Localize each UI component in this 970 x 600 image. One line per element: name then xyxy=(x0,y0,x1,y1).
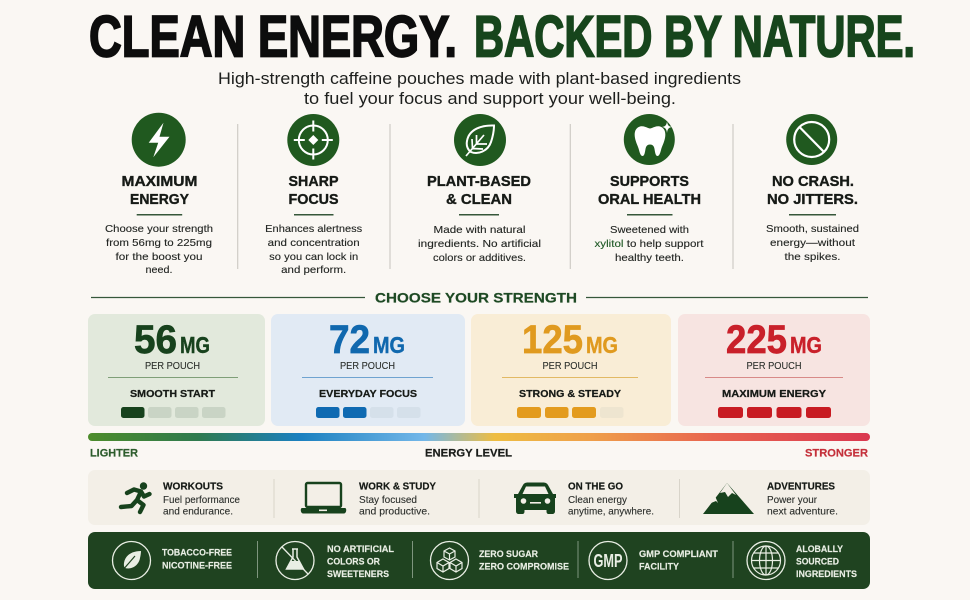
dose value: 125mg: 125 xyxy=(522,318,583,362)
heading: supports oral health xyxy=(598,174,701,216)
dose value: 56mg: MG xyxy=(180,332,210,358)
subtitle: to fuel your focus and support your well-being. xyxy=(304,89,676,108)
badge: tobacco-free nicotine-free: NICOTINE-FREE xyxy=(162,560,232,572)
strength meter: 4 of 4 xyxy=(718,407,831,418)
card: 72mg: PER POUCH xyxy=(340,361,395,372)
heading: plant-based and clean xyxy=(427,174,531,216)
text: maximum energy: for the boost you xyxy=(116,251,203,263)
strength meter: 1 of 4 xyxy=(121,407,226,418)
icon: target xyxy=(287,114,339,166)
card: 72mg xyxy=(271,314,465,426)
card: 225mg xyxy=(678,314,870,426)
use case: on the go: ON THE GO xyxy=(568,482,623,492)
title xyxy=(89,4,915,69)
badge: GMP compliant facility: FACILITY xyxy=(639,562,680,572)
text: sharp focus: and concentration xyxy=(268,237,360,249)
badge: globally sourced ingredients: ALOBALLY xyxy=(796,544,844,555)
use case: work and study xyxy=(359,482,436,518)
panel: use cases xyxy=(88,470,870,525)
benefit dividers xyxy=(238,124,733,269)
panel: trust badges xyxy=(88,532,870,589)
heading: sharp focus: FOCUS xyxy=(288,192,339,208)
badge: GMP compliant facility: GMP COMPLIANT xyxy=(639,549,718,560)
benefit: sharp focus xyxy=(265,114,362,276)
strength meter: 2 of 4 xyxy=(316,407,420,418)
use case: workouts: WORKOUTS xyxy=(163,482,223,492)
badge: globally sourced ingredients xyxy=(796,544,857,580)
badge: no artificial colors or sweeteners: COLORS OR xyxy=(327,556,380,568)
badge: tobacco-free nicotine-free: TOBACCO-FREE xyxy=(162,548,232,558)
icon: car xyxy=(514,482,556,514)
badge: zero sugar zero compromise xyxy=(479,549,569,572)
badge icon: cubes xyxy=(430,542,468,580)
badge icon: GMP: GMP xyxy=(594,551,622,571)
dose value: 225mg: 225 xyxy=(726,318,787,362)
text: no crash no jitters: the spikes. xyxy=(784,251,840,263)
use case: on the go: anytime, anywhere. xyxy=(568,506,654,518)
dose value: 56mg xyxy=(134,318,210,362)
badge icon: leaf xyxy=(112,542,150,580)
title: CLEAN ENERGY. xyxy=(89,4,457,69)
heading: no crash no jitters: NO JITTERS. xyxy=(767,192,858,208)
text: no crash no jitters: energy—without xyxy=(770,237,855,249)
text: supports oral health: xylitol to help support xyxy=(594,238,704,250)
text: sharp focus xyxy=(265,223,362,276)
icon: prohibition sign xyxy=(786,114,837,165)
text: supports oral health: Sweetened with xyxy=(610,224,689,236)
text: maximum energy: from 56mg to 225mg xyxy=(106,237,212,249)
badge icon: crossed flask xyxy=(276,542,314,580)
card: 125mg: PER POUCH xyxy=(542,361,598,372)
text: maximum energy: need. xyxy=(146,264,172,276)
badge: globally sourced ingredients: SOURCED xyxy=(796,556,839,568)
text: sharp focus: so you can lock in xyxy=(269,251,358,263)
text: supports oral health xyxy=(594,224,704,264)
badge icon: GMP xyxy=(589,542,627,580)
badge: no artificial colors or sweeteners xyxy=(327,544,394,580)
heading: maximum energy: ENERGY xyxy=(130,192,189,208)
card: 56mg xyxy=(88,314,265,426)
strength meter: 3 of 4 xyxy=(517,407,624,418)
subtitle: High-strength caffeine pouches made with plant-based ingredients xyxy=(218,69,741,88)
card: 125mg xyxy=(471,314,671,426)
subtitle xyxy=(218,69,741,108)
heading: sharp focus: SHARP xyxy=(288,174,339,190)
use case: on the go: Clean energy xyxy=(568,495,627,506)
badge: zero sugar zero compromise: ZERO SUGAR xyxy=(479,549,538,560)
badge: no artificial colors or sweeteners: NO ARTIFICIAL xyxy=(327,544,394,555)
text: maximum energy: Choose your strength xyxy=(105,223,213,235)
icon: laptop xyxy=(301,483,346,514)
card: 125mg: STRONG & STEADY xyxy=(519,388,621,400)
card: 72mg: EVERYDAY FOCUS xyxy=(319,388,417,400)
dose value: 225mg: MG xyxy=(790,332,822,358)
use case: adventures xyxy=(767,482,838,518)
dose value: 56mg: 56 xyxy=(134,318,177,362)
text: plant-based and clean: ingredients. No artificial xyxy=(418,238,541,250)
use case: on the go xyxy=(568,482,654,518)
card: 56mg: PER POUCH xyxy=(145,361,200,372)
dose value: 225mg xyxy=(726,318,822,362)
benefit: supports oral health xyxy=(594,114,704,264)
text: sharp focus: Enhances alertness xyxy=(265,223,362,235)
benefit: plant-based and clean xyxy=(418,114,541,264)
use case: work and study: and productive. xyxy=(359,506,430,518)
heading: no crash no jitters: NO CRASH. xyxy=(772,174,854,190)
heading: sharp focus xyxy=(288,174,339,216)
heading: plant-based and clean: & CLEAN xyxy=(446,192,512,208)
use case: adventures: Power your xyxy=(767,495,818,506)
use case: workouts xyxy=(163,482,240,518)
icon: leaf xyxy=(454,114,506,166)
card: 225mg: MAXIMUM ENERGY xyxy=(722,388,826,400)
benefit: no crash no jitters xyxy=(766,114,859,263)
heading: maximum energy: MAXIMUM xyxy=(122,174,198,190)
heading: supports oral health: SUPPORTS xyxy=(610,174,689,190)
energy level labels: STRONGER xyxy=(805,448,868,460)
benefit: maximum energy xyxy=(105,113,213,276)
text: plant-based and clean: colors or additives. xyxy=(433,252,526,264)
icon: mountain xyxy=(703,483,754,514)
dose value: 72mg xyxy=(329,318,405,362)
badge: no artificial colors or sweeteners: SWEETENERS xyxy=(327,569,389,580)
heading: supports oral health: ORAL HEALTH xyxy=(598,192,701,208)
icon: runner xyxy=(121,482,150,512)
energy level labels xyxy=(90,448,868,460)
use case: work and study: WORK & STUDY xyxy=(359,482,436,492)
text: no crash no jitters: Smooth, sustained xyxy=(766,223,859,235)
card: 56mg: SMOOTH START xyxy=(130,388,216,400)
dose value: 72mg: 72 xyxy=(329,318,370,362)
badge: globally sourced ingredients: INGREDIENTS xyxy=(796,569,857,580)
card: 225mg: PER POUCH xyxy=(746,361,802,372)
energy level gradient bar xyxy=(88,433,870,441)
badge: zero sugar zero compromise: ZERO COMPROMISE xyxy=(479,562,569,572)
icon: lightning bolt xyxy=(132,113,186,167)
badge: GMP compliant facility xyxy=(639,549,718,572)
text: plant-based and clean: Made with natural xyxy=(434,224,526,236)
use case: workouts: Fuel performance xyxy=(163,495,240,506)
text: maximum energy xyxy=(105,223,213,276)
text: plant-based and clean xyxy=(418,224,541,264)
use case: adventures: ADVENTURES xyxy=(767,482,835,492)
text: supports oral health: healthy teeth. xyxy=(615,252,684,264)
use case: work and study: Stay focused xyxy=(359,495,417,506)
use case: workouts: and endurance. xyxy=(163,506,233,518)
dose value: 125mg xyxy=(522,318,618,362)
energy level labels: ENERGY LEVEL xyxy=(425,448,512,460)
text: sharp focus: and perform. xyxy=(281,264,346,276)
dose value: 72mg: MG xyxy=(373,332,405,358)
energy level labels: LIGHTER xyxy=(90,448,138,460)
section heading: choose your strength: CHOOSE YOUR STRENGTH xyxy=(375,289,577,305)
icon: tooth with sparkle xyxy=(624,114,675,165)
badge icon: globe xyxy=(747,542,785,580)
heading: plant-based and clean: PLANT-BASED xyxy=(427,174,531,190)
dose value: 125mg: MG xyxy=(586,332,618,358)
heading: maximum energy xyxy=(122,174,198,216)
use case: adventures: next adventure. xyxy=(767,506,838,518)
heading: no crash no jitters xyxy=(767,174,858,216)
text: no crash no jitters xyxy=(766,223,859,263)
badge: tobacco-free nicotine-free xyxy=(162,548,232,572)
